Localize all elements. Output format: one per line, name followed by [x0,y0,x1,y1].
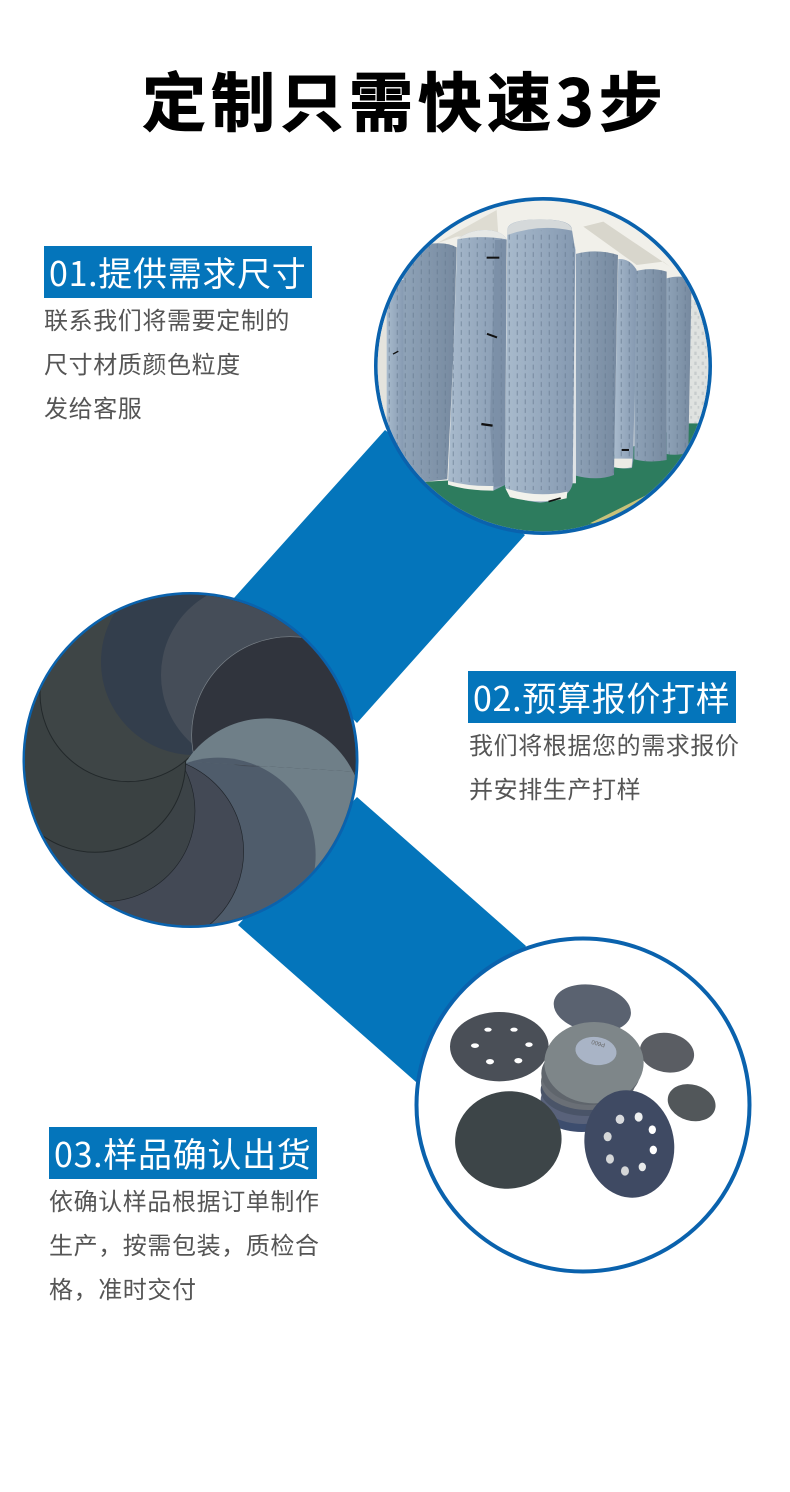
step 2 description [469,726,740,805]
step 1 heading: 01.提供需求尺寸 [49,247,306,296]
step 3 description [49,1182,320,1305]
step 2 description: 我们将根据您的需求报价 [469,726,740,761]
circle photo: assorted sanding discs with a central stack: P600 [590,1038,606,1047]
step 1 description [44,301,290,424]
connector band: step 2 to step 3 [238,797,526,1082]
step 3 description: 格，准时交付 [49,1270,197,1305]
circle photo: stacked abrasive rolls [370,190,720,540]
circle photo: fan of dark sanding discs [22,592,358,928]
connector band: step 1 to step 2 [234,430,525,723]
step 2 heading: 02.预算报价打样 [473,672,730,721]
step 2 description: 并安排生产打样 [469,770,641,805]
step 3 description: 依确认样品根据订单制作 [49,1182,320,1217]
step 1 description: 联系我们将需要定制的 [44,301,290,336]
title: 定制只需快速3步 [142,53,668,145]
step 1 description: 尺寸材质颜色粒度 [44,345,241,380]
step illustrations and connectors [22,197,752,1274]
step 1 description: 发给客服 [44,389,142,424]
circle photo: assorted sanding discs with a central stack [416,938,750,1272]
step 3 description: 生产，按需包装，质检合 [49,1226,320,1261]
step 3 heading: 03.样品确认出货 [54,1128,312,1177]
